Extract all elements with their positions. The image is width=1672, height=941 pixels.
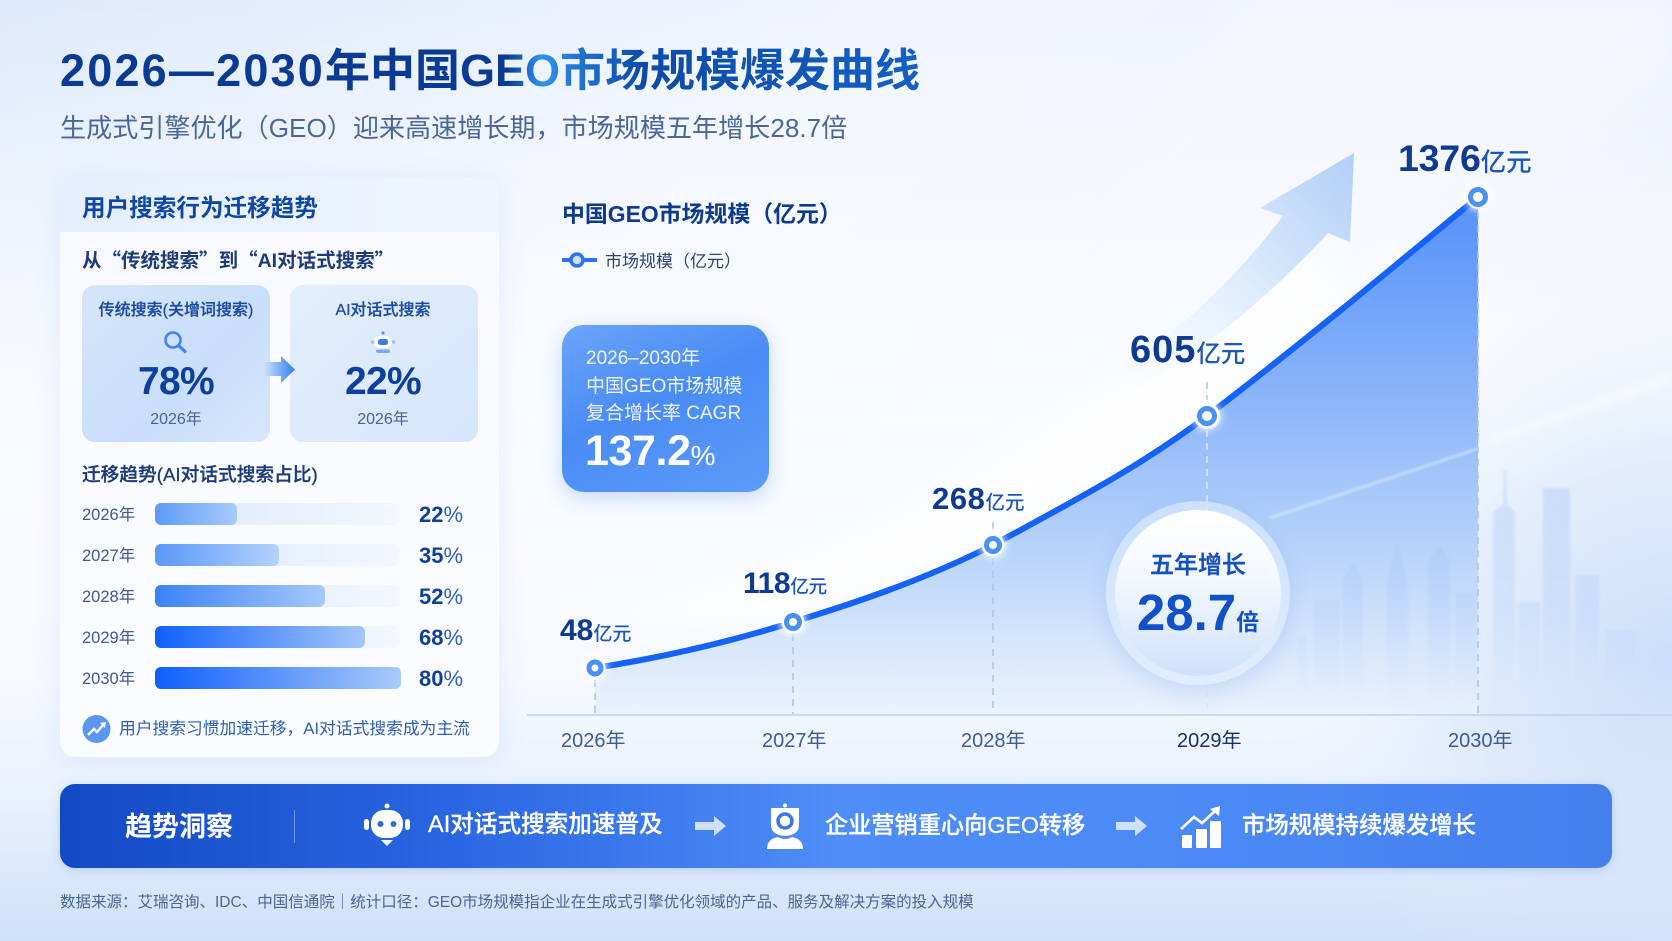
circle heading: 五年增长 — [1150, 552, 1246, 579]
row 2027: 35% — [419, 543, 463, 568]
icon: trend note — [82, 715, 110, 743]
arrow 1 — [695, 816, 726, 836]
area under curve — [595, 197, 1478, 715]
panel heading: 用户搜索行为迁移趋势 — [82, 196, 318, 222]
circle inner — [1115, 510, 1281, 676]
row 2029 — [82, 625, 463, 650]
arrow 2 — [1116, 816, 1147, 836]
subtitle: 生成式引擎优化（GEO）迎来高速增长期，市场规模五年增长28.7倍 — [60, 113, 847, 143]
CAGR value: 137.2% — [585, 427, 715, 475]
migration subheading: 从“传统搜索”到“AI对话式搜索” — [82, 244, 394, 273]
insight 1: AI对话式搜索加速普及 — [428, 812, 663, 838]
card: AI search — [290, 285, 478, 442]
value 78%: 78% — [138, 360, 214, 403]
trend heading: 迁移趋势(AI对话式搜索占比) — [82, 464, 318, 485]
year label: 2026年 — [150, 411, 202, 428]
value label 2030: 1376亿元 — [1398, 137, 1532, 179]
row 2027 — [82, 543, 463, 568]
row 2028: 2028年 — [82, 588, 135, 606]
row 2029: 2029年 — [82, 629, 135, 647]
value label 2026: 48亿元 — [560, 614, 631, 647]
arrow: traditional to AI — [266, 356, 295, 383]
footer source note: 数据来源：艾瑞咨询、IDC、中国信通院｜统计口径：GEO市场规模指企业在生成式引擎优化领域的产品、服务及解决方案的投入规模 — [60, 894, 974, 911]
row 2030: 80% — [419, 666, 463, 691]
card title: AI对话式搜索 — [335, 302, 431, 319]
card title: 传统搜索(关增词搜索) — [99, 302, 253, 319]
value 22%: 22% — [345, 360, 421, 403]
trend note: 用户搜索习惯加速迁移，AI对话式搜索成为主流 — [119, 719, 470, 738]
insight 2: 企业营销重心向GEO转移 — [825, 812, 1085, 838]
icon: robot — [370, 331, 396, 353]
year label: 2026年 — [357, 411, 409, 428]
card: traditional search — [82, 285, 270, 442]
icon: robot — [364, 804, 410, 846]
value label 2028: 268亿元 — [932, 481, 1025, 516]
growth circle — [1106, 501, 1290, 685]
CAGR text — [586, 348, 742, 424]
icon: magnifier — [164, 331, 187, 354]
icon: person — [767, 804, 803, 849]
legend label: 市场规模（亿元） — [605, 252, 741, 271]
axis label 2026: 2026年 — [561, 730, 626, 752]
row 2026: 2026年 — [82, 506, 135, 524]
axis label 2029: 2029年 — [1177, 730, 1242, 752]
callout: CAGR — [562, 325, 769, 492]
legend — [562, 252, 741, 271]
panel header — [60, 177, 499, 232]
curve line — [595, 197, 1478, 668]
insight heading: 趋势洞察 — [125, 812, 233, 842]
legend marker — [562, 252, 597, 268]
axis label 2028: 2028年 — [961, 730, 1026, 752]
row 2030 — [82, 666, 463, 691]
row 2027: 2027年 — [82, 547, 135, 565]
row 2030: 2030年 — [82, 670, 135, 688]
insight divider — [294, 810, 295, 843]
axis — [527, 714, 1672, 716]
data points — [583, 184, 1491, 680]
value label 2029: 605亿元 — [1130, 329, 1245, 371]
bar chart: AI search share — [82, 502, 463, 691]
chart heading: 中国GEO市场规模（亿元） — [562, 201, 842, 227]
insight 3: 市场规模持续爆发增长 — [1242, 812, 1476, 838]
axis label 2030: 2030年 — [1448, 730, 1512, 752]
insight bar — [60, 784, 1612, 868]
CAGR text: 2026–2030年 — [586, 348, 700, 369]
circle value: 28.7倍 — [1137, 584, 1259, 641]
CAGR text: 复合增长率 CAGR — [586, 403, 741, 424]
guide lines — [595, 212, 1478, 714]
row 2028 — [82, 584, 463, 609]
icon: growth chart — [1180, 806, 1221, 848]
row 2028: 52% — [419, 584, 463, 609]
value label 2027: 118亿元 — [743, 567, 827, 600]
row 2026: 22% — [419, 502, 463, 527]
CAGR text: 中国GEO市场规模 — [586, 376, 742, 396]
panel: user search migration — [60, 177, 499, 757]
axis label 2027: 2027年 — [762, 730, 826, 752]
row 2026 — [82, 502, 463, 527]
row 2029: 68% — [419, 625, 463, 650]
skyline — [1297, 470, 1635, 705]
